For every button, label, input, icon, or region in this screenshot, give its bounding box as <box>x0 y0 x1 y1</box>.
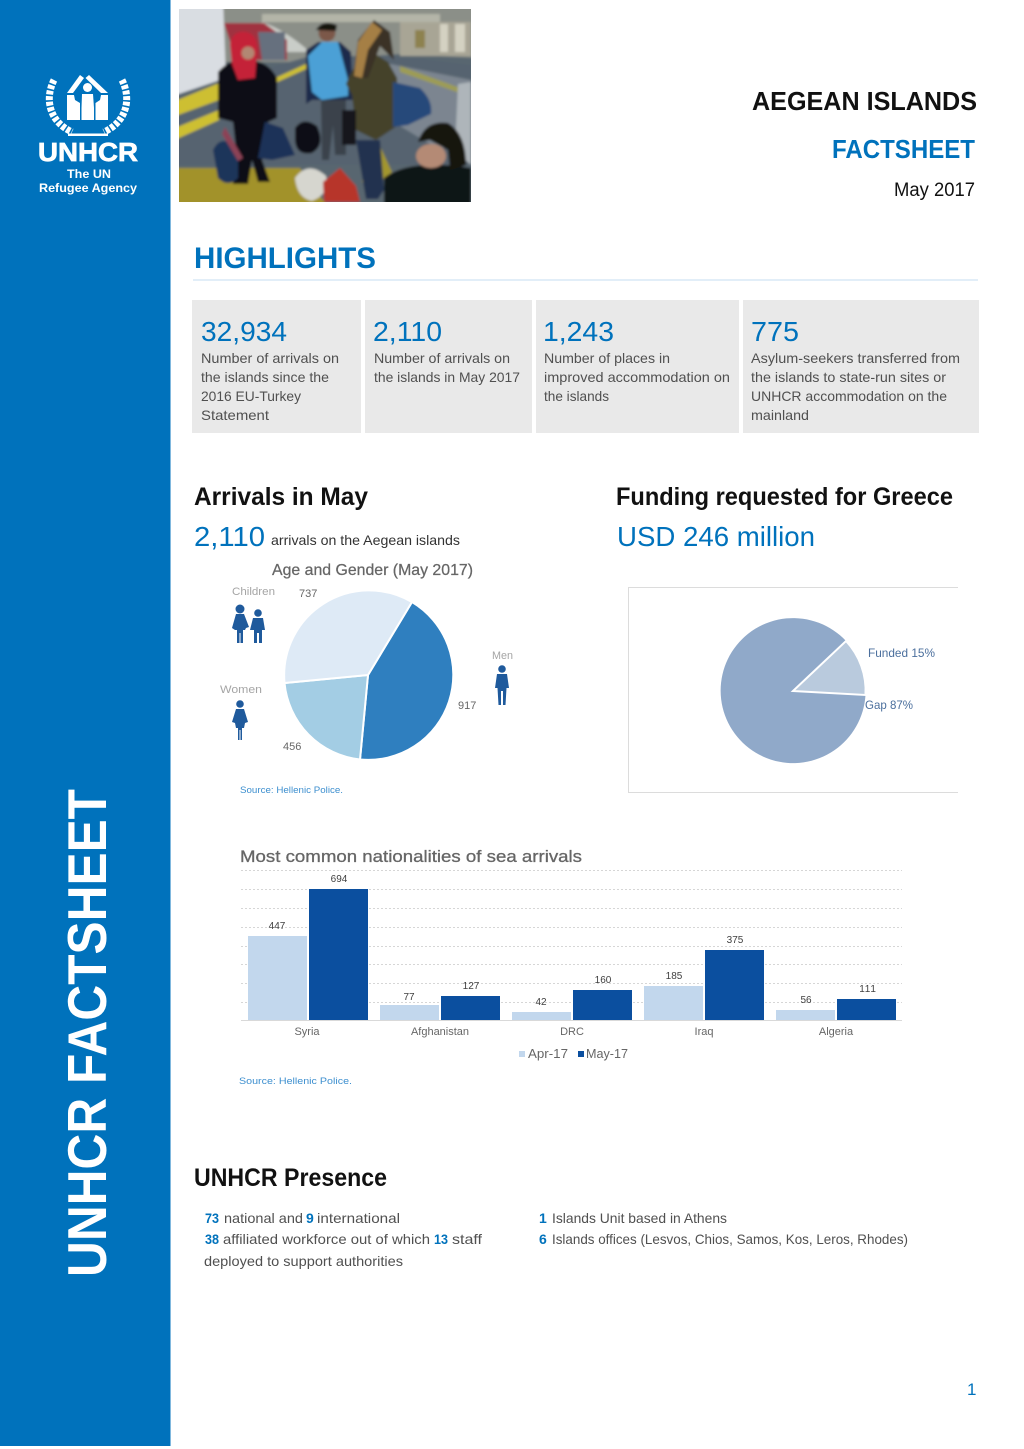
text block: staff: 13 <box>434 1231 448 1247</box>
description: mainland <box>751 407 809 423</box>
data labels: 447 <box>269 921 286 932</box>
category labels <box>294 1026 854 1038</box>
document date: May 2017 <box>894 180 975 201</box>
arrivals stat: 2,110 <box>194 521 265 552</box>
woman with fur hood <box>346 52 397 140</box>
slice: funded <box>793 641 866 695</box>
description <box>544 350 730 404</box>
UNHCR logo <box>38 75 138 195</box>
arrivals stat: arrivals on the Aegean islands <box>271 532 460 548</box>
data labels <box>269 874 877 1008</box>
category labels: Iraq <box>695 1026 713 1038</box>
heading: arrivals in May: Arrivals in May <box>194 483 368 511</box>
sidebar vertical title: UNHCR FACTSHEET <box>56 789 118 1277</box>
deck floor <box>226 55 356 161</box>
description: the islands in May 2017 <box>374 369 520 385</box>
text block: staff: 9 <box>306 1210 314 1226</box>
document title: Aegean Islands: AEGEAN ISLANDS <box>752 86 977 116</box>
data labels: 111 <box>859 984 877 995</box>
description: Number of arrivals on <box>201 350 339 366</box>
logo tagline line 2: Refugee Agency <box>39 181 137 195</box>
bags by woman <box>213 141 238 183</box>
arrivals stat <box>194 521 460 552</box>
text block: offices: 6 <box>539 1231 547 1247</box>
black bag <box>295 121 321 153</box>
label: women: Women <box>220 684 262 696</box>
legend: Apr-17 <box>528 1047 568 1061</box>
icon: UNHCR emblem <box>49 75 127 136</box>
funding stat: USD 246 million <box>617 521 815 552</box>
panel: highlight arrivals since statement <box>192 300 361 433</box>
stat: 1,243: 1,243 <box>543 316 614 347</box>
data labels: 694 <box>331 874 348 885</box>
document subtitle: Factsheet: FACTSHEET <box>832 134 975 164</box>
label: children: Children <box>232 586 275 598</box>
category labels: Algeria <box>819 1026 854 1038</box>
description <box>374 350 520 385</box>
logo tagline line 1: The UN <box>67 167 111 181</box>
legend: May-17 <box>586 1047 628 1061</box>
category labels: DRC <box>560 1026 584 1038</box>
text block: staff: 38 <box>205 1231 219 1247</box>
text block: staff: international <box>317 1210 400 1226</box>
source note: Source: Hellenic Police. <box>239 1076 352 1086</box>
page number: 1 <box>967 1380 976 1399</box>
chart title: Age and Gender (May 2017) <box>272 562 473 579</box>
photo: refugees with UNHCR worker on a ferry <box>179 9 471 202</box>
source note: Source: Hellenic Police. <box>240 785 343 795</box>
boy <box>382 164 471 202</box>
chart title: Most common nationalities of sea arrivals <box>240 847 582 866</box>
blue bag <box>393 82 431 127</box>
UNHCR worker <box>306 42 353 104</box>
ceiling and far wall <box>222 9 471 65</box>
panel: highlight places <box>536 300 739 433</box>
description: 2016 EU-Turkey <box>201 388 301 404</box>
white bag and red bag <box>295 168 327 201</box>
stat: 32,934: 32,934 <box>201 316 287 347</box>
icon: children <box>232 604 265 643</box>
logo wordmark: UNHCR <box>38 137 138 167</box>
description: UNHCR accommodation on the <box>751 388 947 404</box>
text block: offices <box>539 1210 908 1247</box>
category labels: Afghanistan <box>411 1026 469 1038</box>
data labels: 160 <box>595 975 612 986</box>
label: funded: Funded 15% <box>868 646 935 660</box>
value: children: 737 <box>299 588 317 600</box>
red kiosk <box>224 23 287 60</box>
category labels: Syria <box>294 1026 320 1038</box>
value: women: 456 <box>283 741 301 753</box>
icon: man <box>495 665 509 705</box>
description: Number of places in <box>544 350 670 366</box>
icon: woman <box>232 700 248 740</box>
heading: UNHCR presence: UNHCR Presence <box>194 1164 387 1192</box>
description: Asylum-seekers transferred from <box>751 350 960 366</box>
label: gap: Gap 87% <box>865 698 913 712</box>
white wall <box>179 9 228 96</box>
data labels: 185 <box>666 971 683 982</box>
sidebar <box>0 0 170 1446</box>
description: improved accommodation on <box>544 369 730 385</box>
text block: offices: Islands offices (Lesvos, Chios, Samos, Kos, Leros, Rhodes) <box>552 1231 908 1247</box>
right rails <box>455 82 471 165</box>
description <box>201 350 339 423</box>
bars: May 2017 <box>309 889 896 1020</box>
text block: offices: Islands Unit based in Athens <box>552 1210 727 1226</box>
slice: men <box>360 602 453 760</box>
description: the islands since the <box>201 369 329 385</box>
yellow stripes <box>170 64 306 142</box>
legend <box>519 1047 628 1061</box>
slice: women <box>284 675 368 760</box>
text block: staff <box>204 1210 482 1269</box>
text block: staff: staff <box>452 1231 482 1247</box>
chart frame <box>628 588 958 792</box>
description: Statement <box>201 407 269 423</box>
bars: April 2017 <box>248 936 835 1020</box>
heading: funding requested: Funding requested for Greece <box>616 483 953 511</box>
description <box>751 350 960 423</box>
description: the islands <box>544 388 609 404</box>
stat: 775: 775 <box>751 316 799 347</box>
description: the islands to state-run sites or <box>751 369 946 385</box>
data labels: 42 <box>535 997 547 1008</box>
text block: staff: deployed to support authorities <box>204 1253 403 1269</box>
data labels: 127 <box>463 981 480 992</box>
panel: highlight transfers <box>743 300 979 433</box>
value: men: 917 <box>458 700 476 712</box>
chart: funding pie <box>628 588 958 792</box>
text block: staff: 73 <box>205 1210 219 1226</box>
stat: 2,110: 2,110 <box>373 316 442 347</box>
data labels: 77 <box>403 992 415 1003</box>
label: men: Men <box>492 650 513 662</box>
slice: children <box>284 590 412 683</box>
yellow floor <box>179 166 326 202</box>
heading: highlights: HIGHLIGHTS <box>194 242 376 275</box>
text block: staff: affiliated workforce out of which <box>223 1231 430 1247</box>
chart: age and gender pie <box>220 562 513 795</box>
text block: offices: 1 <box>539 1210 547 1226</box>
woman in hijab <box>218 60 277 184</box>
data labels: 375 <box>727 935 744 946</box>
panel: highlight arrivals May <box>365 300 532 433</box>
chart: nationalities bar chart <box>239 847 902 1086</box>
data labels: 56 <box>800 995 812 1006</box>
text block: staff: national and <box>224 1210 303 1226</box>
slice: gap <box>721 618 866 763</box>
description: Number of arrivals on <box>374 350 510 366</box>
